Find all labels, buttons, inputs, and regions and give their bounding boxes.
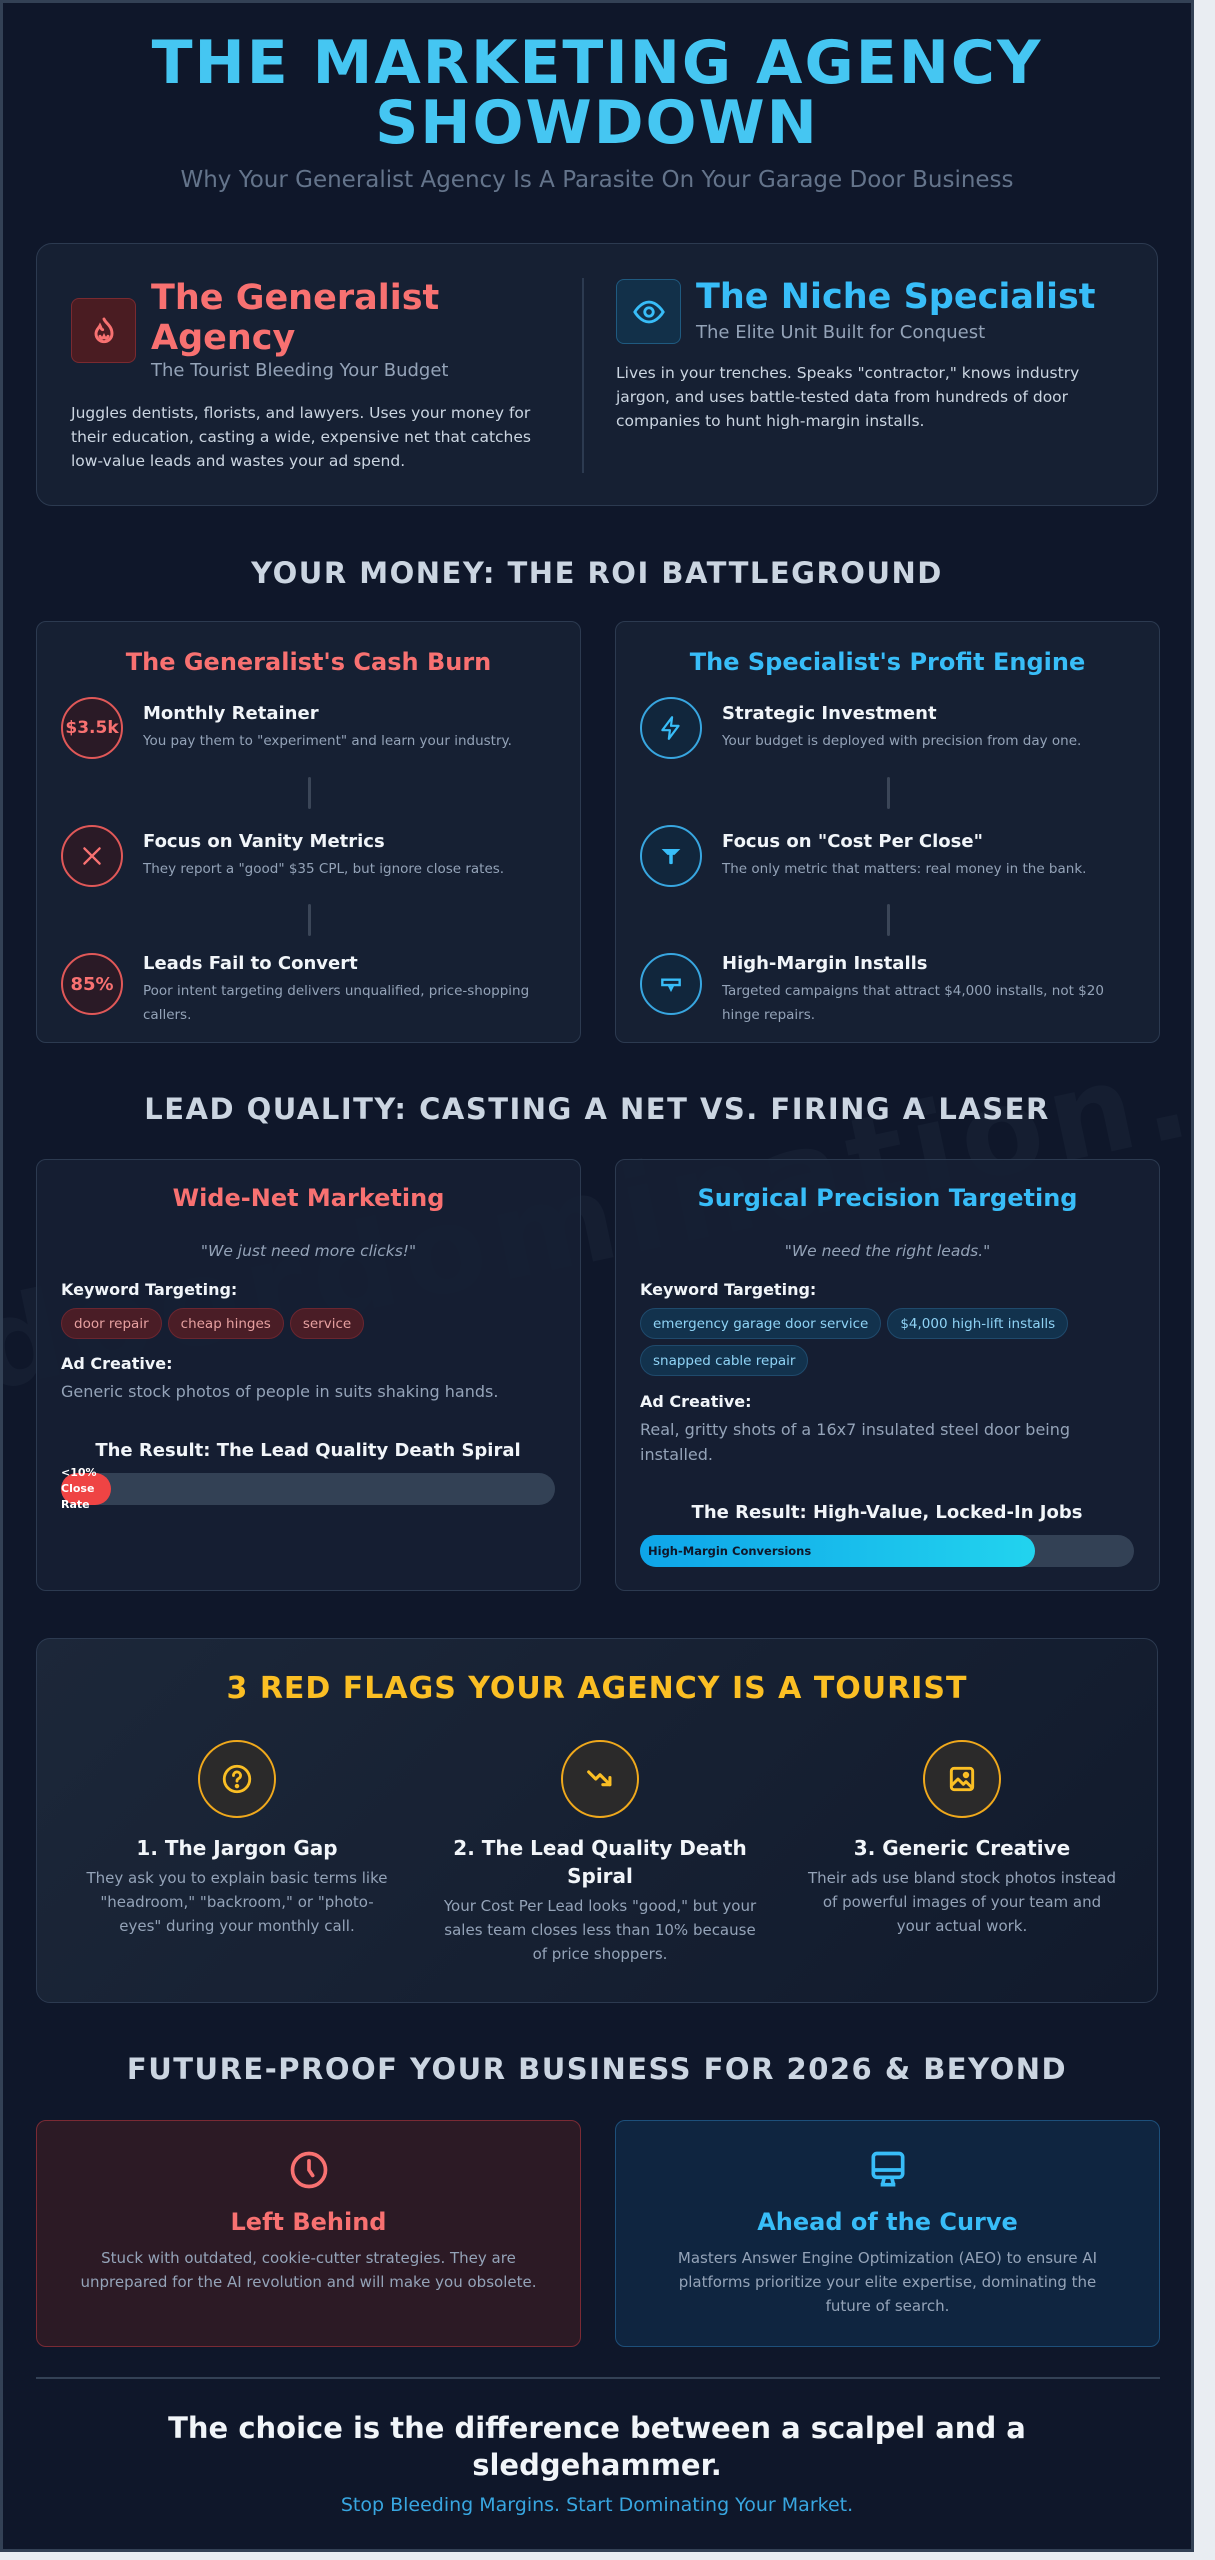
result: conversions bar: [640, 1502, 1134, 1567]
panel: left behind: Stuck with outdated, cookie-cutter strategies. They are unprepared for the AI revolution and will make you obsolete.: [80, 2249, 536, 2291]
row: monthly retainer: [61, 697, 512, 759]
icon: question: [198, 1740, 276, 1818]
result: death spiral bar: [61, 1440, 555, 1511]
row: vanity metrics: Focus on Vanity Metrics: [143, 831, 385, 852]
keyword targeting: [61, 1280, 364, 1339]
panel: ahead of the curve: Ahead of the Curve: [757, 2208, 1018, 2236]
flag 3: [808, 1740, 1116, 1935]
row: vanity metrics: They report a "good" $35 CPL, but ignore close rates.: [143, 861, 504, 877]
icon: eye: [616, 279, 681, 344]
ad creative: [640, 1392, 1070, 1464]
keyword targeting: [640, 1280, 1068, 1376]
row: monthly retainer: You pay them to "experiment" and learn your industry.: [143, 733, 512, 749]
panel title: Surgical Precision Targeting: [698, 1184, 1077, 1212]
row: cost per close: [640, 825, 1086, 887]
row: leads fail: Leads Fail to Convert: [143, 953, 358, 974]
icon: image: [923, 1740, 1001, 1818]
row: strategic investment: Your budget is deployed with precision from day one.: [722, 733, 1081, 749]
heading: lead quality: LEAD QUALITY: CASTING A NET VS. FIRING A LASER: [144, 1092, 1050, 1126]
heading: red flags: 3 RED FLAGS YOUR AGENCY IS A TOURIST: [226, 1671, 968, 1706]
row: monthly retainer: $3.5k: [65, 718, 119, 738]
icon: clock: [290, 2152, 328, 2188]
row: high-margin installs: High-Margin Installs: [722, 953, 928, 974]
row: monthly retainer: Monthly Retainer: [143, 703, 319, 724]
closing statement: [168, 2411, 1026, 2482]
row: high-margin installs: Targeted campaigns that attract $4,000 installs, not $20 hinge repairs.: [722, 983, 1104, 1023]
ad creative: Real, gritty shots of a 16x7 insulated steel door being installed.: [640, 1420, 1070, 1464]
row: strategic investment: Strategic Investment: [722, 703, 937, 724]
panel title: Wide-Net Marketing: [173, 1184, 444, 1212]
panel: red flags: [36, 1638, 1158, 2003]
keyword targeting: cheap hinges: [181, 1316, 271, 1332]
closing statement: The choice is the difference between a scalpel and a: [168, 2411, 1026, 2445]
panel: ahead of the curve: Masters Answer Engine Optimization (AEO) to ensure AI platforms prioritize your elite expertise, dominating the future of search.: [678, 2249, 1097, 2315]
row: cost per close: Focus on "Cost Per Close": [722, 831, 983, 852]
row: high-margin installs: [640, 953, 1104, 1023]
ad creative: Ad Creative:: [640, 1392, 752, 1411]
flag 3: Their ads use bland stock photos instead of powerful images of your team and your actual work.: [808, 1869, 1116, 1935]
result: death spiral bar: Close: [61, 1482, 94, 1495]
panel: surgical precision: [615, 1159, 1160, 1591]
flag 3: 3. Generic Creative: [854, 1836, 1070, 1860]
result: death spiral bar: Rate: [61, 1498, 90, 1511]
panel: left behind: Left Behind: [230, 2208, 386, 2236]
keyword targeting: $4,000 high-lift installs: [900, 1316, 1055, 1332]
ad creative: Generic stock photos of people in suits shaking hands.: [61, 1382, 498, 1401]
subheading: specialist: The Elite Unit Built for Conquest: [696, 322, 985, 343]
flag 2: Your Cost Per Lead looks "good," but your sales team closes less than 10% because of price shoppers.: [444, 1897, 756, 1963]
heading: generalist: The Generalist Agency: [151, 278, 439, 358]
panel: generalist cash burn: [36, 621, 581, 1043]
text: generalist: Juggles dentists, florists, and lawyers. Uses your money for their education, casting a wide, expensive net that catches low-value leads and wastes your ad spend.: [71, 404, 531, 470]
panel: comparison intro: [36, 243, 1158, 506]
panel title: The Specialist's Profit Engine: [690, 648, 1085, 676]
keyword targeting: emergency garage door service: [653, 1316, 868, 1332]
row: cost per close: The only metric that matters: real money in the bank.: [722, 861, 1086, 877]
icon: flame: [71, 298, 136, 363]
heading: ROI: YOUR MONEY: THE ROI BATTLEGROUND: [251, 556, 943, 590]
flag 1: They ask you to explain basic terms like "headroom," "backroom," or "photo-eyes" during your monthly call.: [87, 1869, 387, 1935]
title: THE MARKETING AGENCY: [152, 28, 1042, 98]
panel title: The Generalist's Cash Burn: [126, 648, 491, 676]
keyword targeting: door repair: [74, 1316, 149, 1332]
result: conversions bar: The Result: High-Value, Locked-In Jobs: [692, 1502, 1082, 1523]
title: [152, 28, 1042, 158]
row: leads fail: Poor intent targeting delivers unqualified, price-shopping callers.: [143, 983, 529, 1023]
keyword targeting: service: [303, 1316, 351, 1332]
flag 1: 1. The Jargon Gap: [136, 1836, 338, 1860]
keyword targeting: Keyword Targeting:: [640, 1280, 816, 1299]
row: leads fail: 85%: [70, 974, 114, 994]
closing statement: sledgehammer.: [472, 2448, 722, 2482]
ad creative: Ad Creative:: [61, 1354, 172, 1373]
result: death spiral bar: The Result: The Lead Quality Death Spiral: [95, 1440, 521, 1461]
title: SHOWDOWN: [375, 88, 819, 158]
quote: "We need the right leads.": [785, 1242, 990, 1260]
keyword targeting: Keyword Targeting:: [61, 1280, 237, 1299]
icon: trending down: [561, 1740, 639, 1818]
row: strategic investment: [640, 697, 1081, 759]
row: leads fail: [61, 953, 529, 1023]
panel: wide-net marketing: [36, 1159, 581, 1591]
flag 2: 2. The Lead Quality Death Spiral: [453, 1836, 747, 1888]
panel: ahead of the curve: [615, 2120, 1160, 2347]
heading: future-proof: FUTURE-PROOF YOUR BUSINESS FOR 2026 & BEYOND: [127, 2052, 1067, 2086]
closing tagline: Stop Bleeding Margins. Start Dominating Your Market.: [341, 2494, 853, 2516]
subheading: generalist: The Tourist Bleeding Your Budget: [151, 360, 448, 381]
ad creative: [61, 1354, 498, 1401]
heading: specialist: The Niche Specialist: [696, 277, 1096, 317]
flag 2: [444, 1740, 756, 1963]
quote: "We just need more clicks!": [201, 1242, 416, 1260]
result: conversions bar: High-Margin Conversions: [648, 1544, 811, 1558]
panel: specialist profit engine: [615, 621, 1160, 1043]
panel: left behind: [36, 2120, 581, 2347]
keyword targeting: snapped cable repair: [653, 1353, 795, 1369]
subtitle: Why Your Generalist Agency Is A Parasite On Your Garage Door Business: [180, 167, 1014, 193]
flag 1: [86, 1740, 387, 1935]
icon: monitor: [872, 2152, 904, 2186]
result: death spiral bar: <10%: [61, 1466, 97, 1479]
row: vanity metrics: [61, 825, 504, 887]
text: specialist: Lives in your trenches. Speaks "contractor," knows industry jargon, and uses battle-tested data from hundreds of door companies to hunt high-margin installs.: [616, 364, 1079, 430]
